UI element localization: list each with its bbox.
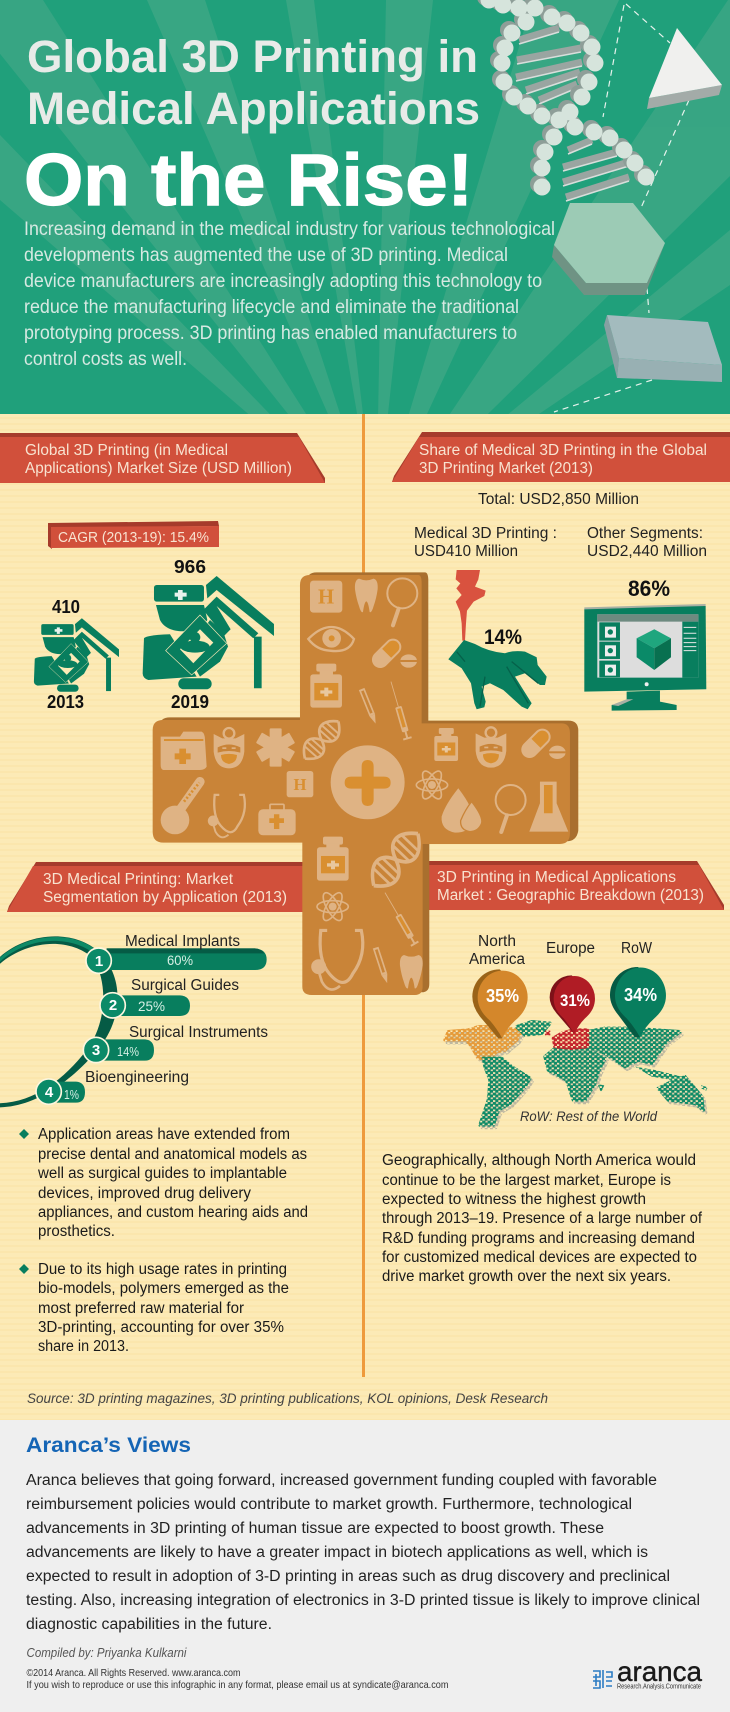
body text: advancements are likely to have a greater impact in biotech applications as well, which is: [26, 1544, 648, 1561]
bullet marker: [19, 1264, 29, 1274]
icon: hospital sign: [310, 581, 342, 613]
text block: bullet one: appliances, and custom hearing aids and: [38, 1204, 308, 1221]
author credit: Compiled by: Priyanka Kulkarni: [26, 1645, 187, 1660]
body text: diagnostic capabilities in the future.: [26, 1616, 272, 1633]
icon: pill: [368, 635, 405, 671]
icon: stethoscope bottom arm: [311, 930, 363, 990]
icon: hospital sign small: [287, 771, 313, 797]
panel: Aranca's views: [0, 1420, 730, 1712]
logo: aranca: aranca: [617, 1656, 702, 1687]
title: [24, 31, 480, 221]
panel: cream body: [0, 414, 730, 1420]
text block: bullet one: Application areas have extended from: [38, 1126, 290, 1143]
dashed construction lines: [554, 4, 689, 412]
icon: bottle right arm: [434, 728, 458, 761]
text block: bullet two: most preferred raw material for: [38, 1300, 244, 1317]
text block: geographic commentary: drive market growth over the next six years.: [382, 1268, 671, 1285]
centre divider: [362, 414, 365, 1377]
label: Europe: Europe: [546, 940, 595, 957]
text block: bullet two: 3D-printing, accounting for over 35%: [38, 1319, 284, 1336]
intro paragraph: Increasing demand in the medical industry for various technological: [24, 218, 555, 240]
body text: expected to result in adoption of 3-D printing in areas such as drug discovery and preclinical: [26, 1568, 670, 1585]
copyright: If you wish to reproduce or use this infographic in any format, please email us at syndicate@aranca.com: [26, 1679, 449, 1691]
callout: CAGR: [48, 521, 219, 549]
banner: market size: [0, 433, 325, 483]
banner: geographic breakdown: [420, 861, 724, 910]
icon: monitor with 3D cube: [584, 604, 706, 711]
text: medical 3D printing share: USD410 Million: [414, 543, 518, 560]
banner: share of medical 3D printing: Share of Medical 3D Printing in the Global: [419, 442, 707, 459]
map dots: [445, 1022, 708, 1128]
body text: reimbursement policies would contribute to market growth. Furthermore, technological: [26, 1496, 632, 1513]
text: other segments share: USD2,440 Million: [587, 543, 707, 560]
icon: DNA bottom arm: [364, 824, 428, 895]
panel: header: [0, 0, 730, 524]
body text: advancements in 3D printing of human tissue are expected to boost growth. These: [26, 1520, 604, 1537]
icon: syringe bottom arm: [385, 888, 419, 950]
icon: nurse face: [214, 728, 244, 768]
text block: bullet one: [19, 1126, 308, 1240]
item 4: [45, 1069, 189, 1102]
intro paragraph: developments has augmented the use of 3D printing. Medical: [24, 244, 508, 266]
icon: magnifier right arm: [496, 785, 526, 832]
label: North America: [469, 933, 525, 968]
copyright: ©2014 Aranca. All Rights Reserved. www.aranca.com: [26, 1667, 241, 1679]
body text: [26, 1472, 700, 1633]
title: Medical Applications: [27, 83, 480, 134]
item 4: Bioengineering: [85, 1069, 189, 1086]
intro paragraph: prototyping process. 3D printing has enabled manufacturers to: [24, 322, 517, 344]
text: medical 3D printing share: Medical 3D Printing :: [414, 525, 557, 542]
text block: bullet one: precise dental and anatomical models as: [38, 1146, 307, 1163]
icon: first aid kit: [258, 804, 296, 835]
value 31%: 31%: [560, 991, 590, 1010]
copyright: [26, 1667, 449, 1691]
value 34%: 34%: [624, 985, 657, 1005]
item 2: 25%: [138, 998, 165, 1014]
pin: North America: [472, 969, 528, 1038]
ring and bars: [0, 936, 267, 1107]
banner: market size: Applications) Market Size (USD Million): [25, 460, 292, 477]
text block: bullet one: prosthetics.: [38, 1223, 115, 1240]
chart: application segmentation: [0, 933, 268, 1107]
banner: segmentation by application: [7, 862, 310, 912]
banner: segmentation by application: Segmentation by Application (2013): [43, 889, 287, 906]
sun rays: [0, 0, 730, 524]
icon: atom right arm: [416, 768, 448, 802]
pin: RoW: [610, 967, 666, 1037]
label: RoW: RoW: [621, 940, 652, 957]
text block: geographic commentary: expected to witness the highest growth: [382, 1191, 646, 1208]
icon: protected hands 2013: [34, 618, 119, 692]
cross 3D side: [159, 572, 578, 992]
heading: Aranca’s Views: [26, 1434, 191, 1457]
item 2: Surgical Guides: [131, 977, 239, 994]
value 14%: 14%: [484, 626, 522, 649]
item 3: 3: [92, 1042, 100, 1059]
map note: RoW: Rest of the World: [520, 1108, 658, 1124]
item 4: 4: [45, 1084, 54, 1101]
text block: geographic commentary: for customized medical devices are expected to: [382, 1249, 697, 1266]
body text: testing. Also, increasing integration of electronics in 3-D printed tissue is likely to improve clinical: [26, 1592, 700, 1609]
text block: geographic commentary: continue to be the largest market, Europe is: [382, 1172, 671, 1189]
banner: geographic breakdown: 3D Printing in Medical Applications: [437, 869, 676, 886]
icon: gloved hand with printed part: [448, 570, 547, 709]
icon: pill right arm: [518, 725, 554, 761]
banner: market size: Global 3D Printing (in Medical: [25, 442, 228, 459]
icon: white triangle: [647, 28, 722, 109]
logo: aranca: Research.Analysis.Communicate: [617, 1684, 701, 1690]
value 966: 966: [174, 557, 206, 577]
icon: magnifier: [387, 578, 417, 625]
icon: hexagon: [552, 203, 665, 295]
text: medical 3D printing share: [414, 525, 557, 560]
label: North America: America: [469, 951, 525, 968]
icon: tooth: [355, 579, 378, 612]
icon: drops: [442, 788, 482, 833]
icon: hospital sign small: H: [293, 775, 306, 794]
text block: bullet two: [19, 1261, 289, 1355]
icon: bottle bottom arm: [317, 837, 349, 881]
icon: centre plus: [331, 745, 405, 819]
icon: hospital sign: H: [318, 586, 334, 608]
icon: medical asterisk: [256, 728, 295, 767]
text: total market: Total: USD2,850 Million: [478, 491, 639, 508]
bullet marker: [19, 1129, 29, 1139]
icon: flask: [529, 782, 568, 832]
value 35%: 35%: [486, 986, 519, 1006]
year 2013: 2013: [47, 692, 84, 712]
value 86%: 86%: [628, 576, 670, 601]
callout: CAGR: CAGR (2013-19): 15.4%: [58, 529, 209, 546]
item 1: 60%: [167, 952, 193, 968]
icon: syringe: [391, 682, 412, 741]
pin: Europe: [550, 975, 595, 1034]
body text: Aranca believes that going forward, increased government funding coupled with favorable: [26, 1472, 657, 1489]
banner: segmentation by application: 3D Medical Printing: Market: [43, 871, 234, 888]
icon: pencil: [359, 688, 378, 725]
item 2: 2: [109, 997, 117, 1014]
text: other segments share: [587, 525, 707, 560]
year 2019: 2019: [171, 692, 209, 712]
icon: small pill right arm: [549, 746, 566, 759]
intro paragraph: reduce the manufacturing lifecycle and eliminate the traditional: [24, 296, 519, 318]
medical cross with icons: [153, 572, 578, 995]
icon: DNA helix: [477, 0, 654, 201]
item 1: 1: [95, 953, 103, 970]
title: Global 3D Printing in: [27, 31, 478, 82]
icon: eye: [308, 627, 354, 651]
icon: DNA: [297, 715, 346, 765]
icon: nurse face right arm: [476, 727, 506, 768]
text block: bullet two: bio-models, polymers emerged as the: [38, 1280, 289, 1297]
intro paragraph: device manufacturers are increasingly adopting this technology to: [24, 270, 542, 292]
item 3: 14%: [117, 1044, 139, 1059]
item 2: [109, 977, 239, 1014]
text block: bullet one: devices, improved drug delivery: [38, 1185, 251, 1202]
icon: thermometer: [161, 782, 200, 834]
icon: tooth bottom arm: [400, 955, 423, 988]
text: other segments share: Other Segments:: [587, 525, 703, 542]
source note: Source: 3D printing magazines, 3D printing publications, KOL opinions, Desk Research: [27, 1390, 548, 1406]
icon: protected hands 2019: [143, 576, 274, 689]
icon: folder: [161, 732, 207, 770]
text block: bullet one: well as surgical guides to implantable: [37, 1165, 287, 1182]
banner: share of medical 3D printing: [392, 432, 730, 482]
item 4: 1%: [64, 1087, 79, 1102]
text block: geographic commentary: through 2013–19. Presence of a large number of: [382, 1210, 703, 1227]
text block: bullet two: Due to its high usage rates in printing: [38, 1261, 287, 1278]
text block: geographic commentary: Geographically, although North America would: [382, 1152, 696, 1169]
icon: small pill: [400, 654, 417, 668]
icon: pencil bottom arm: [373, 947, 390, 984]
text block: bullet two: share in 2013.: [38, 1338, 129, 1355]
icon: bottle: [310, 664, 342, 708]
title: On the Rise!: [24, 140, 473, 221]
item 1: Medical Implants: [125, 933, 240, 950]
item 3: Surgical Instruments: [129, 1024, 268, 1041]
cross face: [153, 575, 570, 995]
chart: world map with pins: [445, 933, 708, 1128]
banner: share of medical 3D printing: 3D Printing Market (2013): [419, 460, 593, 477]
text block: geographic commentary: R&D funding programs and increasing demand: [382, 1230, 695, 1247]
intro paragraph: [24, 218, 555, 370]
item 3: [92, 1024, 268, 1059]
item 1: [95, 933, 240, 970]
icon: stethoscope: [208, 795, 245, 837]
icon: slab: [604, 315, 722, 382]
icon: atom bottom arm: [317, 890, 348, 923]
intro paragraph: control costs as well.: [24, 348, 187, 370]
text block: geographic commentary: [382, 1152, 703, 1285]
label: North America: North: [478, 933, 516, 950]
value 410: 410: [52, 597, 80, 617]
chart: market size 2013 vs 2019: [34, 557, 274, 712]
banner: geographic breakdown: Market : Geographic Breakdown (2013): [437, 887, 704, 904]
